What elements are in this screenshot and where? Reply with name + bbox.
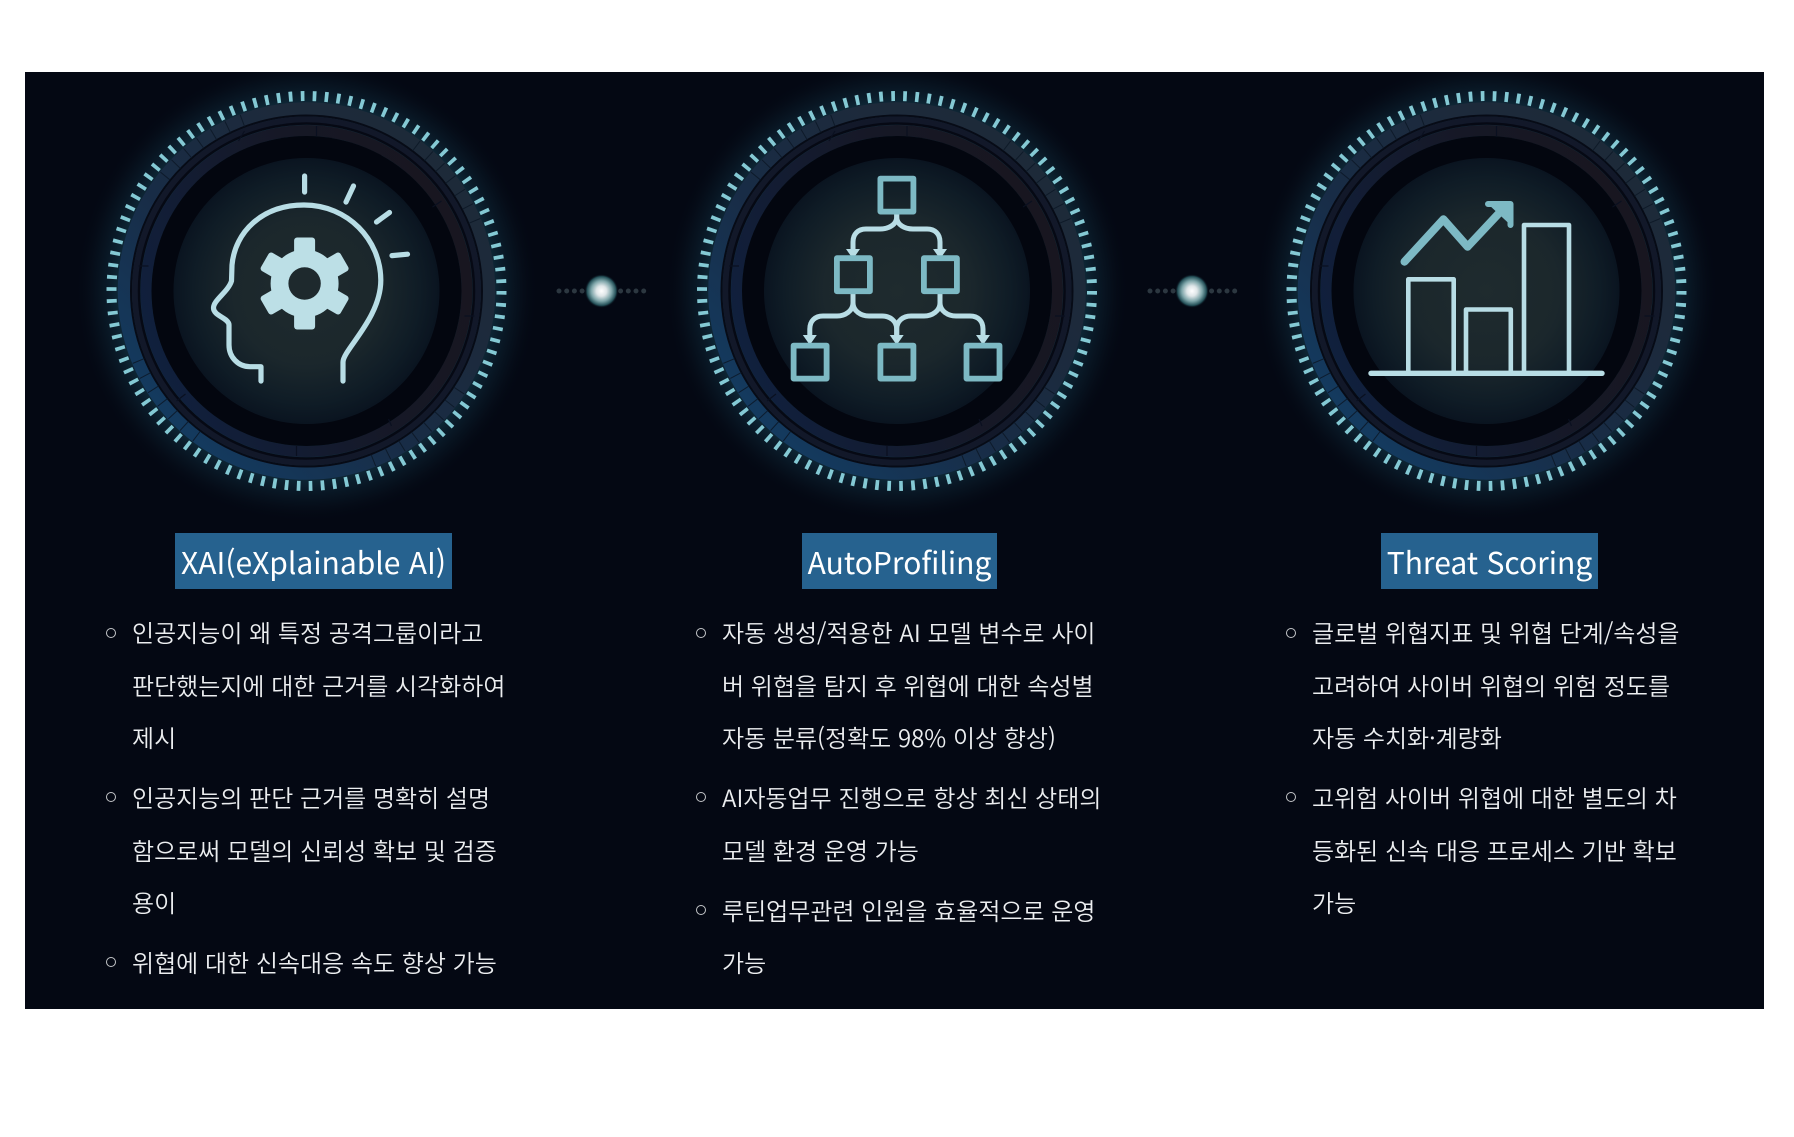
text block: AutoProfiling bullets: AI자동업무 진행으로 항상 최신 상태의 <box>722 779 1101 814</box>
ring: XAI <box>74 59 538 523</box>
text block: XAI bullets: 제시 <box>132 719 176 754</box>
icon: bar chart with rising arrow <box>1371 204 1602 373</box>
text block: AutoProfiling bullets <box>696 614 1101 979</box>
heading: AutoProfiling: AutoProfiling <box>808 539 991 583</box>
text block: Threat Scoring bullets <box>1286 614 1680 919</box>
text block: Threat Scoring bullets: 자동 수치화·계량화 <box>1312 719 1502 754</box>
text block: XAI bullets <box>106 614 505 979</box>
text block: XAI bullets: 인공지능이 왜 특정 공격그룹이라고 <box>132 614 483 649</box>
text block: Threat Scoring bullets: 고위험 사이버 위협에 대한 별도의 차 <box>1312 779 1677 814</box>
text block: Threat Scoring bullets: 가능 <box>1312 884 1356 919</box>
text block: AutoProfiling bullets: 자동 분류(정확도 98% 이상 향상) <box>722 719 1056 754</box>
text block: AutoProfiling bullets: 버 위협을 탐지 후 위협에 대한 속성별 <box>722 667 1094 702</box>
ring: Threat Scoring <box>1254 59 1718 523</box>
text block: AutoProfiling bullets: 가능 <box>722 944 766 979</box>
heading: XAI: XAI(eXplainable AI) <box>181 539 446 583</box>
heading: Threat Scoring: Threat Scoring <box>1387 539 1592 583</box>
connector: first glowing dot <box>559 274 647 308</box>
text block: XAI bullets: 용이 <box>132 884 176 919</box>
text block: AutoProfiling bullets: 모델 환경 운영 가능 <box>722 832 919 867</box>
text block: AutoProfiling bullets: 자동 생성/적용한 AI 모델 변수로 사이 <box>722 614 1096 649</box>
text block: XAI bullets: 인공지능의 판단 근거를 명확히 설명 <box>132 779 490 814</box>
connector: second glowing dot <box>1150 274 1237 308</box>
icon: hierarchy chart <box>794 179 1000 379</box>
text block: AutoProfiling bullets: 루틴업무관련 인원을 효율적으로 운영 <box>722 892 1095 927</box>
ring: AutoProfiling <box>665 59 1129 523</box>
text block: XAI bullets: 위협에 대한 신속대응 속도 향상 가능 <box>132 944 497 979</box>
text block: XAI bullets: 함으로써 모델의 신뢰성 확보 및 검증 <box>132 832 497 867</box>
panel: dark background with rings, icons and connectors <box>25 72 1764 1009</box>
text block: Threat Scoring bullets: 고려하여 사이버 위협의 위험 정도를 <box>1312 667 1670 702</box>
text block: Threat Scoring bullets: 글로벌 위협지표 및 위협 단계/속성을 <box>1312 614 1680 649</box>
icon: head with gear <box>214 176 408 381</box>
text block: XAI bullets: 판단했는지에 대한 근거를 시각화하여 <box>132 667 505 702</box>
text block: Threat Scoring bullets: 등화된 신속 대응 프로세스 기반 확보 <box>1312 832 1677 867</box>
